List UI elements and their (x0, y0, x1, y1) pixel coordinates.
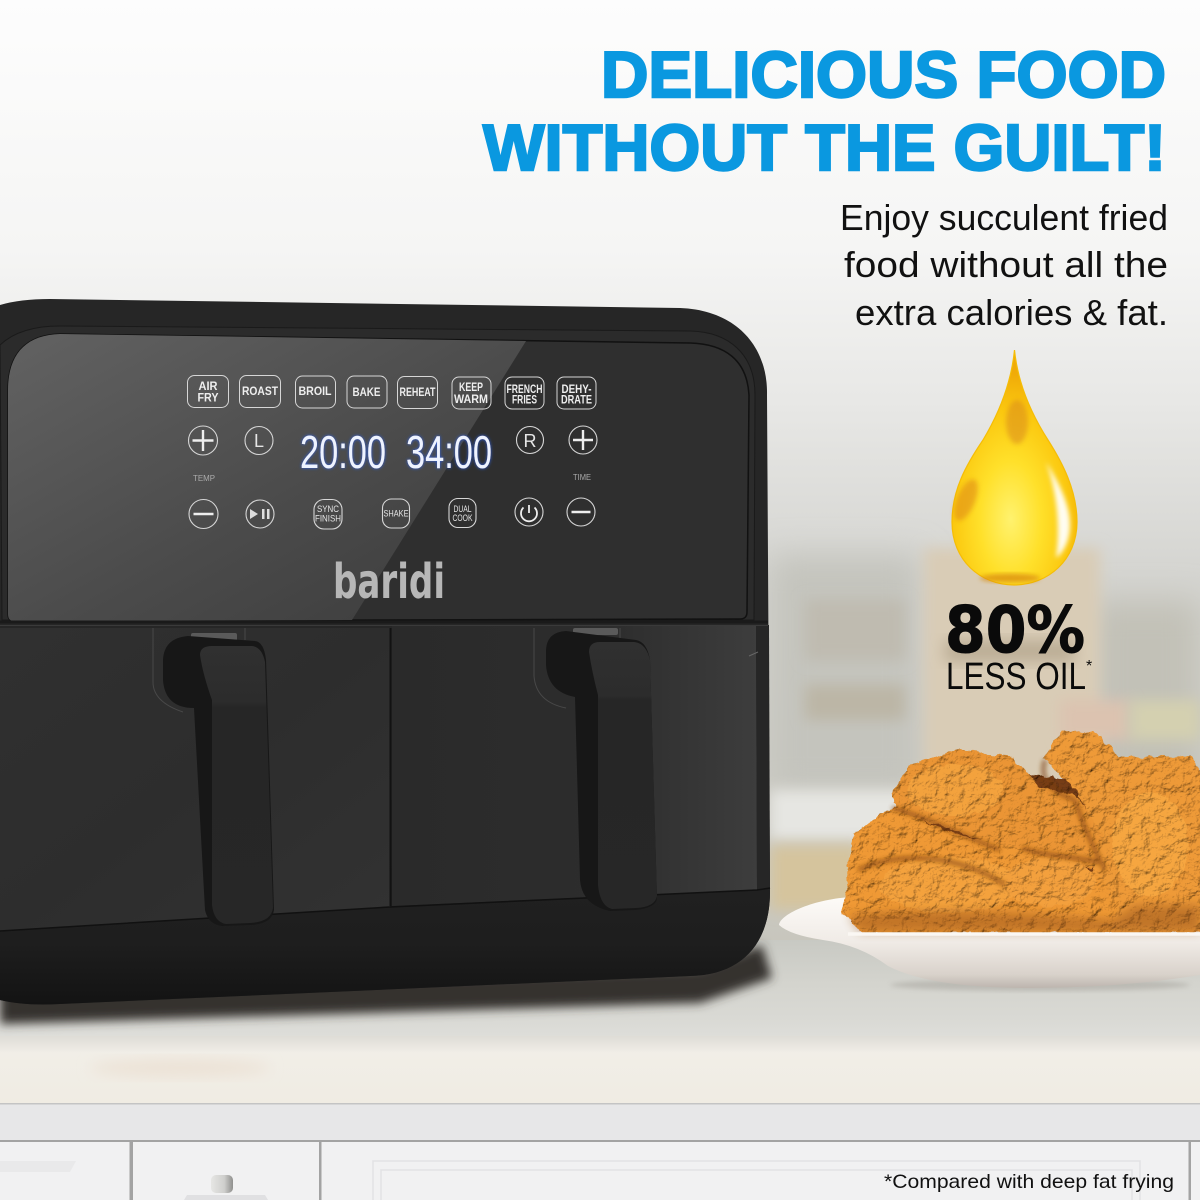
cabinet knob (211, 1175, 233, 1193)
chicken creases (858, 760, 1105, 885)
callout: 80% less oil: LESS OIL (946, 656, 1086, 698)
callout: 80% less oil (945, 594, 1092, 698)
headline (483, 38, 1166, 184)
round and small touch keys (188, 426, 597, 529)
plate (779, 897, 1200, 991)
key labels: TIME (573, 473, 591, 482)
left handle (163, 633, 274, 926)
button labels: BAKE (352, 385, 380, 399)
icon: oil drop (949, 350, 1077, 585)
callout: 80% less oil: 80% (945, 594, 1085, 668)
button labels: DEHY- (562, 382, 592, 396)
brand logo: baridi (333, 554, 445, 610)
headline: DELICIOUS FOOD (601, 38, 1166, 111)
button labels: KEEP (459, 380, 483, 394)
footnote: *Compared with deep fat frying (884, 1171, 1174, 1193)
kitchen counter (0, 940, 1200, 1140)
subheading: extra calories & fat. (855, 292, 1168, 333)
button labels: DRATE (561, 392, 592, 406)
key labels: COOK (452, 513, 473, 524)
function buttons (188, 376, 596, 409)
right handle (546, 628, 657, 911)
right drawer (392, 626, 757, 906)
play pause icon (250, 509, 270, 519)
key labels: SYNC (317, 504, 339, 515)
kitchen cabinets (0, 1140, 1200, 1200)
button labels: FRIES (512, 392, 537, 406)
button labels: FRENCH (506, 382, 542, 396)
LED timer display: 20:00 (300, 426, 386, 478)
air fryer (0, 299, 770, 1004)
subheading: food without all the (844, 244, 1168, 285)
fryer base (0, 800, 770, 1004)
LED timer display: 34:00 (406, 426, 492, 478)
key labels: DUAL (454, 504, 472, 515)
fryer body (0, 299, 770, 1004)
button labels: REHEAT (400, 385, 436, 399)
button labels: BROIL (298, 384, 332, 398)
button labels: WARM (454, 392, 488, 406)
key labels: SHAKE (384, 508, 408, 520)
button labels: FRY (198, 390, 218, 404)
key labels (193, 431, 591, 524)
button labels: ROAST (242, 384, 279, 398)
subheading: Enjoy succulent fried (840, 197, 1168, 238)
button labels (198, 379, 592, 406)
headline: WITHOUT THE GUILT! (483, 111, 1166, 184)
key labels: FINISH (315, 514, 341, 524)
key labels: R (524, 431, 536, 451)
control panel glass (8, 334, 749, 621)
fried chicken (842, 730, 1200, 933)
chicken lower shading (848, 905, 1200, 932)
key labels: L (254, 431, 264, 451)
left drawer (0, 628, 390, 931)
subheading (840, 197, 1168, 333)
key labels: TEMP (193, 474, 215, 483)
button labels: AIR (198, 379, 218, 393)
LED timer display (300, 426, 492, 478)
callout: 80% less oil: * (1086, 658, 1092, 675)
